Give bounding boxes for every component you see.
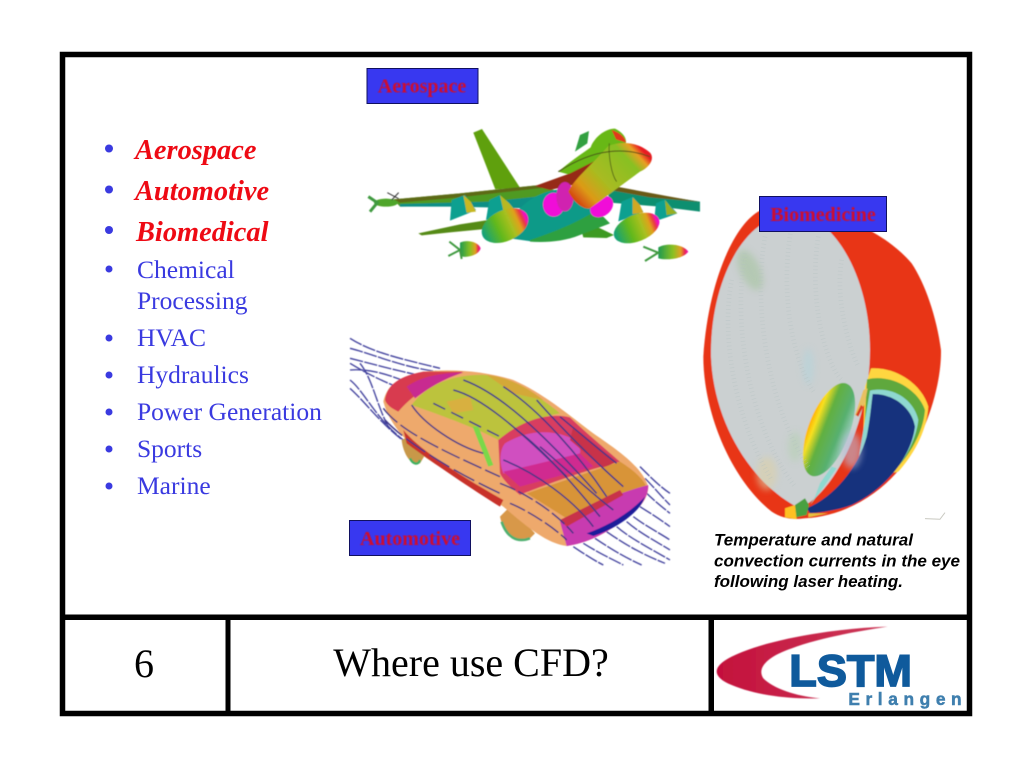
ciliary body — [792, 498, 809, 518]
red rear end — [385, 372, 463, 412]
streamlines behind car — [350, 338, 670, 565]
green pillar — [473, 427, 493, 467]
caption: eye image: Temperature and natural — [714, 530, 914, 550]
label: Biomedicine — [760, 196, 886, 232]
rear window green — [412, 375, 560, 440]
navy chamber — [807, 394, 915, 513]
scale mark — [925, 513, 945, 519]
intakes — [586, 192, 617, 222]
bullet: Sports: Sports — [137, 434, 202, 463]
bonnet bands — [527, 462, 647, 518]
slide frame — [60, 54, 972, 714]
slide number: 6 — [134, 641, 154, 686]
image: car with streamlines — [350, 338, 670, 565]
logo: LSTM Erlangen — [717, 627, 962, 709]
logo wordmark: LSTM — [789, 647, 912, 696]
right pod — [609, 207, 664, 249]
lens — [792, 376, 866, 483]
bullet: Hydraulics: Hydraulics — [137, 360, 249, 389]
bullet: Chemical Processing — [106, 255, 248, 315]
wings — [393, 185, 557, 207]
rainbow: aqueous band — [862, 368, 928, 480]
under body — [510, 188, 607, 242]
bullet: Aerospace: Aerospace — [133, 135, 256, 166]
caption: eye image: following laser heating. — [714, 572, 903, 591]
caption: eye image: convection currents in the eye — [714, 552, 960, 570]
gray vitreous — [711, 219, 870, 506]
iris strip — [810, 467, 837, 505]
wing stores — [450, 195, 476, 221]
surface streamlines — [383, 380, 623, 540]
side lower red — [403, 430, 503, 507]
image: eye temperature field — [703, 211, 945, 519]
label: Aerospace — [367, 68, 478, 104]
bullet: Marine: Marine — [137, 471, 211, 500]
red outer shell — [703, 211, 941, 519]
bullet: HVAC — [106, 323, 206, 352]
wingtip missile — [368, 193, 399, 212]
slide title: Where use CFD? — [333, 640, 609, 685]
vitreous tints — [732, 246, 862, 490]
bullet: Biomedical: Biomedical — [135, 217, 269, 248]
bullet: Chemical Processing: Chemical — [137, 255, 235, 284]
label: Aerospace: Aerospace — [378, 76, 466, 98]
roof magenta — [498, 416, 620, 495]
bomb left — [460, 241, 481, 257]
label: Biomedicine: Biomedicine — [770, 204, 876, 226]
caption: eye image — [714, 530, 960, 591]
nose — [568, 143, 652, 209]
bullet: HVAC: HVAC — [137, 323, 206, 352]
bullet: Power Generation: Power Generation — [137, 397, 322, 426]
bullet list: application areas — [105, 135, 322, 500]
bullet: Sports — [106, 434, 202, 463]
bullet: Automotive: Automotive — [133, 176, 269, 207]
body — [383, 370, 648, 546]
left pod — [476, 201, 534, 250]
label: Automotive: Automotive — [360, 528, 460, 550]
bomb right — [658, 245, 688, 259]
bullet: Chemical Processing: Processing — [137, 286, 248, 315]
velocity vectors — [728, 227, 858, 487]
wheels — [402, 437, 425, 464]
logo subtitle: Erlangen — [848, 689, 962, 709]
upper body — [558, 129, 626, 177]
image: aircraft CFD surface — [368, 129, 700, 261]
label: Automotive — [350, 520, 470, 556]
logo swoosh — [717, 627, 888, 698]
